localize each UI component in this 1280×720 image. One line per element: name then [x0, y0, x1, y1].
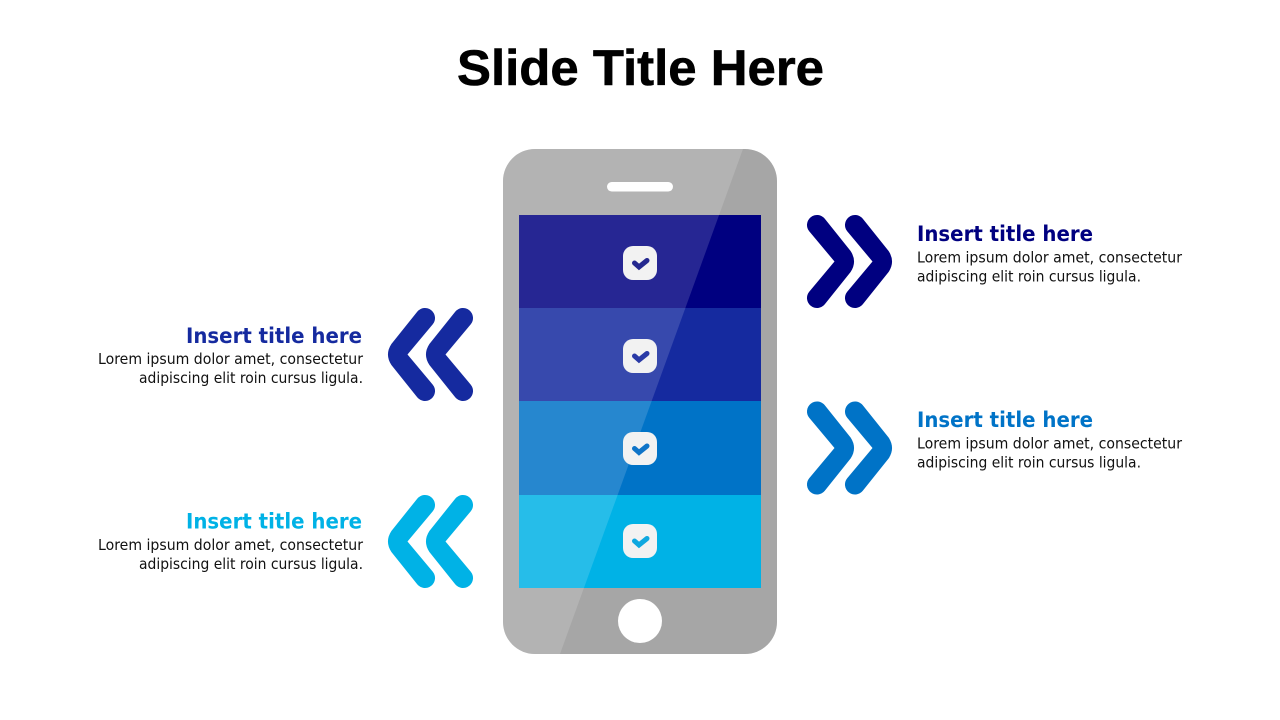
- icon: chevrons left cyan: [388, 495, 473, 588]
- body: Lorem ipsum dolor amet, consectetur: [917, 434, 1183, 452]
- heading: Insert title here: [917, 222, 1093, 246]
- body: Lorem ipsum dolor amet, consectetur: [917, 248, 1183, 266]
- text block: top right: [917, 222, 1183, 286]
- title: Slide Title Here: [457, 40, 824, 96]
- icon: chevrons right navy: [807, 215, 892, 308]
- text block: lower right: [917, 408, 1183, 472]
- screen band 1: [519, 215, 761, 308]
- text block: middle left: [98, 324, 364, 387]
- screen band 2: [519, 308, 761, 401]
- icon: chevrons left dark blue: [388, 308, 473, 401]
- heading: Insert title here: [186, 324, 362, 348]
- home button: [618, 599, 662, 643]
- body: Lorem ipsum dolor amet, consectetur: [98, 536, 364, 554]
- check icon 4: [623, 524, 657, 558]
- check icon 3: [623, 432, 657, 465]
- glass reflection: [503, 149, 743, 654]
- speaker: [607, 182, 673, 192]
- text block: lower right: adipiscing elit roin cursus ligula.: [917, 454, 1141, 472]
- check icon 2: [623, 339, 657, 373]
- text block: top right: adipiscing elit roin cursus ligula.: [917, 268, 1141, 286]
- phone illustration: [503, 149, 777, 654]
- check icon 1: [623, 246, 657, 280]
- body: Lorem ipsum dolor amet, consectetur: [98, 350, 364, 368]
- phone body: [503, 149, 777, 654]
- screen band 4: [519, 495, 761, 588]
- icon: chevrons right blue: [807, 401, 892, 495]
- text block: bottom left: adipiscing elit roin cursus ligula.: [139, 555, 363, 573]
- heading: Insert title here: [917, 408, 1093, 432]
- text block: middle left: adipiscing elit roin cursus ligula.: [139, 369, 363, 387]
- screen band 3: [519, 401, 761, 495]
- text block: bottom left: [98, 510, 364, 573]
- heading: Insert title here: [186, 510, 362, 534]
